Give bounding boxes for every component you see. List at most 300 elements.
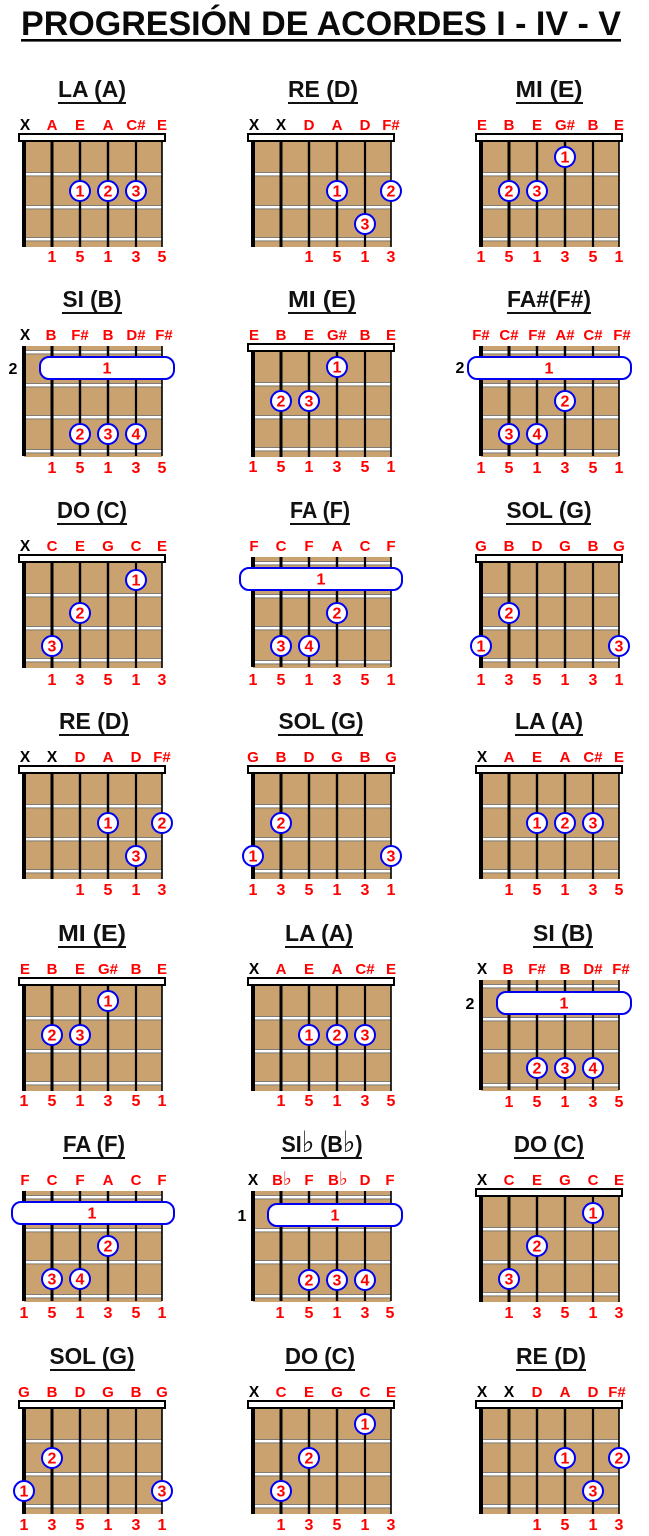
note names <box>248 1169 395 1190</box>
interval numbers: 5 <box>158 460 167 477</box>
interval numbers: 1 <box>132 882 141 899</box>
interval numbers: 1 <box>305 459 314 476</box>
interval numbers: 3 <box>48 1517 57 1534</box>
finger positions <box>468 357 631 444</box>
note names: G <box>102 538 114 555</box>
fret number: 2 <box>9 361 18 378</box>
note names: X <box>20 749 31 766</box>
interval numbers: 5 <box>615 1094 624 1111</box>
chord: LA (A) row 1 <box>19 76 167 266</box>
note names: G <box>559 1172 571 1189</box>
note names: C <box>588 1172 599 1189</box>
interval numbers: 3 <box>589 882 598 899</box>
interval numbers: 1 <box>333 1093 342 1110</box>
finger positions: 1 <box>560 996 569 1012</box>
note names: X <box>249 961 260 978</box>
interval numbers: 1 <box>333 882 342 899</box>
note names: D# <box>583 961 603 978</box>
chord name: LA (A) <box>515 708 583 734</box>
note names: F <box>385 1172 395 1189</box>
interval numbers: 5 <box>277 672 286 689</box>
interval numbers: 3 <box>561 249 570 266</box>
finger positions <box>271 357 347 411</box>
finger positions: 2 <box>277 394 286 410</box>
note names: C <box>360 1384 371 1401</box>
interval numbers: 5 <box>305 882 314 899</box>
finger positions: 3 <box>505 426 514 444</box>
finger positions: 2 <box>305 1450 314 1468</box>
note names: D <box>532 538 543 555</box>
finger positions <box>98 813 172 866</box>
finger positions: 1 <box>104 994 113 1010</box>
note names: F# <box>71 327 89 344</box>
note names: E <box>386 327 396 344</box>
interval numbers: 1 <box>249 882 258 899</box>
interval numbers: 1 <box>20 1093 29 1110</box>
finger positions <box>268 1204 402 1290</box>
note names: F <box>386 538 396 555</box>
note names: E <box>157 117 167 134</box>
finger positions: 1 <box>545 360 554 378</box>
interval numbers: 5 <box>158 249 167 266</box>
note names: C <box>504 1172 515 1189</box>
interval numbers: 3 <box>333 459 342 476</box>
note names: X <box>47 749 58 766</box>
chord: RE (D) row 7 <box>476 1343 629 1534</box>
note names: E <box>614 1172 624 1189</box>
interval numbers: 5 <box>104 672 113 689</box>
interval numbers: 1 <box>533 249 542 266</box>
fret number: 2 <box>456 360 465 377</box>
chord name: FA#(F#) <box>507 286 591 312</box>
chord name: SI (B) <box>62 286 122 312</box>
interval numbers: 1 <box>615 249 624 266</box>
note names: C# <box>499 327 519 344</box>
interval numbers: 5 <box>533 672 542 689</box>
interval numbers: 1 <box>277 1517 286 1534</box>
interval numbers <box>20 1093 167 1110</box>
fretboard <box>19 766 165 879</box>
interval numbers <box>48 672 167 689</box>
note names: B <box>504 117 515 134</box>
note names: X <box>20 327 31 344</box>
finger positions: 2 <box>533 1060 542 1078</box>
interval numbers: 5 <box>361 459 370 476</box>
finger positions: 4 <box>589 1060 598 1078</box>
interval numbers: 5 <box>561 1517 570 1534</box>
interval numbers: 1 <box>505 1305 514 1322</box>
note names: G <box>613 538 625 555</box>
finger positions: 2 <box>305 1272 314 1290</box>
interval numbers: 5 <box>305 1093 314 1110</box>
note names: F# <box>613 327 631 344</box>
interval numbers <box>276 1305 395 1322</box>
interval numbers: 1 <box>561 882 570 899</box>
finger positions: 1 <box>331 1208 340 1224</box>
interval numbers: 3 <box>387 1517 396 1534</box>
note names: A <box>103 1172 114 1189</box>
interval numbers: 1 <box>104 460 113 477</box>
note names: E <box>157 961 167 978</box>
chord name: LA (A) <box>58 76 126 102</box>
finger positions <box>14 1448 172 1501</box>
note names: A <box>504 749 515 766</box>
finger positions: 3 <box>533 184 542 200</box>
interval numbers <box>249 882 396 899</box>
interval numbers: 1 <box>104 1517 113 1534</box>
finger positions: 2 <box>48 1028 57 1044</box>
interval numbers: 1 <box>333 1305 342 1322</box>
interval numbers: 5 <box>387 1093 396 1110</box>
finger positions: 3 <box>305 394 314 410</box>
note names: B♭ <box>328 1169 348 1190</box>
fretboard <box>476 555 622 668</box>
finger positions <box>12 1202 174 1289</box>
interval numbers: 5 <box>533 1094 542 1111</box>
finger positions <box>497 992 631 1078</box>
note names: X <box>477 1172 488 1189</box>
interval numbers <box>305 249 396 266</box>
note names: A <box>47 117 58 134</box>
note names <box>20 1172 167 1189</box>
note names: E <box>532 1172 542 1189</box>
note names: B <box>276 327 287 344</box>
interval numbers: 5 <box>305 1305 314 1322</box>
note names: C <box>276 1384 287 1401</box>
finger positions: 3 <box>361 1028 370 1044</box>
interval numbers <box>505 882 624 899</box>
interval numbers: 5 <box>76 1517 85 1534</box>
note names: E <box>304 961 314 978</box>
chord name: RE (D) <box>288 76 358 102</box>
interval numbers: 1 <box>387 459 396 476</box>
interval numbers: 1 <box>48 672 57 689</box>
interval numbers: 5 <box>505 249 514 266</box>
interval numbers: 3 <box>387 249 396 266</box>
interval numbers: 1 <box>76 1093 85 1110</box>
note names <box>20 749 171 766</box>
interval numbers: 3 <box>277 882 286 899</box>
note names <box>20 117 167 134</box>
interval numbers: 3 <box>104 1093 113 1110</box>
note names <box>475 538 625 555</box>
note names: A <box>103 749 114 766</box>
interval numbers <box>76 882 167 899</box>
finger positions: 2 <box>387 184 396 200</box>
chord name: DO (C) <box>514 1131 584 1157</box>
interval numbers <box>477 672 624 689</box>
fretboard <box>19 555 165 668</box>
chord: SI (B) row 2 <box>9 286 174 477</box>
fret number: 1 <box>238 1208 247 1225</box>
note names: D <box>75 1384 86 1401</box>
note names: F <box>304 538 314 555</box>
finger positions: 3 <box>48 1272 57 1288</box>
note names: B <box>46 327 57 344</box>
interval numbers: 5 <box>132 1305 141 1322</box>
finger positions: 3 <box>132 184 141 200</box>
chord: SOL (G) row 7 <box>14 1343 172 1534</box>
interval numbers: 1 <box>104 249 113 266</box>
chord name: LA (A) <box>285 920 353 946</box>
note names: X <box>249 1384 260 1401</box>
chord: LA (A) row 5 <box>248 920 396 1110</box>
note names: F <box>75 1172 85 1189</box>
note names <box>249 538 396 555</box>
interval numbers <box>277 1517 396 1534</box>
interval numbers: 1 <box>305 249 314 266</box>
note names: F# <box>153 749 171 766</box>
interval numbers: 3 <box>333 672 342 689</box>
note names: C# <box>126 117 146 134</box>
note names: G <box>102 1384 114 1401</box>
note names <box>477 1172 624 1189</box>
note names: F# <box>528 961 546 978</box>
note names: D <box>304 117 315 134</box>
finger positions: 4 <box>533 426 542 444</box>
interval numbers: 1 <box>387 882 396 899</box>
interval numbers: 1 <box>361 249 370 266</box>
note names: B <box>131 961 142 978</box>
note names: C <box>47 1172 58 1189</box>
note names: A <box>560 749 571 766</box>
note names: F <box>157 1172 167 1189</box>
finger positions: 4 <box>305 638 314 656</box>
note names: D <box>588 1384 599 1401</box>
note names: E <box>75 961 85 978</box>
note names: E <box>304 1384 314 1401</box>
note names: A <box>332 117 343 134</box>
fretboard <box>476 1189 622 1302</box>
note names: G# <box>98 961 119 978</box>
chord name: MI (E) <box>58 920 126 946</box>
finger positions: 1 <box>20 1484 29 1500</box>
note names: C# <box>583 327 603 344</box>
finger positions: 2 <box>533 1238 542 1256</box>
note names: C <box>360 538 371 555</box>
finger positions <box>327 181 401 234</box>
note names: X <box>477 1384 488 1401</box>
finger positions: 2 <box>48 1450 57 1468</box>
note names <box>249 117 400 134</box>
finger positions: 2 <box>505 184 514 200</box>
interval numbers: 5 <box>48 1305 57 1322</box>
finger positions <box>42 570 146 656</box>
finger positions: 2 <box>76 426 85 444</box>
interval numbers: 1 <box>20 1305 29 1322</box>
note names: B <box>47 1384 58 1401</box>
note names <box>249 327 396 344</box>
interval numbers: 1 <box>615 672 624 689</box>
finger positions <box>299 1025 375 1045</box>
finger positions <box>70 181 146 201</box>
finger positions <box>243 813 401 866</box>
chord: LA (A) row 4 <box>476 708 624 899</box>
interval numbers: 1 <box>505 1094 514 1111</box>
finger positions <box>499 147 575 201</box>
interval numbers: 3 <box>561 460 570 477</box>
interval numbers: 3 <box>158 882 167 899</box>
finger positions: 3 <box>104 426 113 444</box>
note names <box>20 538 167 555</box>
finger positions <box>240 568 402 656</box>
chord: SI♭ (B♭) row 6 <box>238 1125 402 1322</box>
note names <box>249 961 396 978</box>
interval numbers: 5 <box>615 882 624 899</box>
chord: FA#(F#) row 2 <box>456 286 631 477</box>
fretboard <box>479 346 620 457</box>
fretboard <box>19 978 165 1091</box>
interval numbers: 3 <box>589 1094 598 1111</box>
finger positions: 1 <box>132 572 141 590</box>
note names: G <box>331 749 343 766</box>
finger positions: 4 <box>132 426 141 444</box>
interval numbers: 1 <box>305 672 314 689</box>
interval numbers: 3 <box>615 1517 624 1534</box>
finger positions: 2 <box>158 816 167 832</box>
interval numbers <box>20 1305 167 1322</box>
interval numbers: 5 <box>76 460 85 477</box>
finger positions: 1 <box>477 638 486 656</box>
note names: G <box>156 1384 168 1401</box>
interval numbers: 3 <box>132 249 141 266</box>
fret number: 2 <box>466 996 475 1013</box>
note names: B♭ <box>272 1169 292 1190</box>
fretboard <box>479 980 620 1091</box>
note names: B <box>503 961 514 978</box>
interval numbers <box>249 459 396 476</box>
interval numbers: 3 <box>158 672 167 689</box>
note names: D <box>360 1172 371 1189</box>
finger positions <box>471 603 629 656</box>
chord name: MI (E) <box>516 76 582 102</box>
finger positions: 1 <box>561 1450 570 1468</box>
finger positions: 4 <box>76 1272 85 1288</box>
interval numbers: 1 <box>158 1093 167 1110</box>
note names: X <box>249 117 260 134</box>
finger positions: 3 <box>615 638 624 656</box>
interval numbers: 1 <box>20 1517 29 1534</box>
finger positions <box>271 1414 375 1501</box>
finger positions: 3 <box>589 816 598 832</box>
fretboard <box>248 1401 394 1514</box>
interval numbers: 3 <box>533 1305 542 1322</box>
interval numbers <box>533 1517 624 1534</box>
interval numbers: 1 <box>249 672 258 689</box>
note names: C <box>131 538 142 555</box>
interval numbers: 3 <box>132 1517 141 1534</box>
interval numbers: 3 <box>589 672 598 689</box>
finger positions: 2 <box>277 816 286 832</box>
note names: G# <box>327 327 348 344</box>
interval numbers: 5 <box>277 459 286 476</box>
chord: MI (E) row 1 <box>476 76 624 266</box>
interval numbers <box>48 249 167 266</box>
chord: RE (D) row 4 <box>19 708 172 899</box>
title: PROGRESIÓN DE ACORDES I - IV - V <box>21 5 621 43</box>
finger positions <box>42 991 118 1045</box>
note names: X <box>20 538 31 555</box>
note names: F# <box>608 1384 626 1401</box>
finger positions: 1 <box>249 848 258 866</box>
interval numbers: 3 <box>615 1305 624 1322</box>
interval numbers: 1 <box>76 882 85 899</box>
note names: E <box>20 961 30 978</box>
note names <box>477 749 624 766</box>
chord name: FA (F) <box>63 1131 125 1157</box>
note names <box>247 749 397 766</box>
note names <box>249 1384 396 1401</box>
fretboard <box>22 1191 163 1302</box>
interval numbers: 1 <box>533 460 542 477</box>
interval numbers <box>477 460 624 477</box>
interval numbers: 1 <box>533 1517 542 1534</box>
finger positions: 1 <box>361 1416 370 1434</box>
finger positions: 3 <box>277 638 286 656</box>
finger positions: 1 <box>88 1206 97 1222</box>
chord name: SOL (G) <box>506 497 592 523</box>
note names: G <box>559 538 571 555</box>
note names: G <box>475 538 487 555</box>
interval numbers: 1 <box>361 1517 370 1534</box>
note names: B <box>560 961 571 978</box>
finger positions: 1 <box>305 1028 314 1044</box>
interval numbers: 3 <box>361 882 370 899</box>
finger positions: 2 <box>104 184 113 200</box>
note names: F <box>249 538 259 555</box>
interval numbers: 5 <box>533 882 542 899</box>
finger positions: 3 <box>277 1484 286 1500</box>
note names: B <box>360 327 371 344</box>
note names: D <box>131 749 142 766</box>
interval numbers: 3 <box>361 1305 370 1322</box>
note names: A <box>332 961 343 978</box>
note names: E <box>477 117 487 134</box>
interval numbers: 5 <box>104 882 113 899</box>
note names: A <box>332 538 343 555</box>
finger positions: 1 <box>104 816 113 832</box>
chord: DO (C) row 7 <box>248 1343 396 1534</box>
chord: SI (B) row 5 <box>466 920 631 1111</box>
fretboard <box>251 557 392 668</box>
interval numbers: 1 <box>48 249 57 266</box>
chord: DO (C) row 6 <box>476 1131 624 1322</box>
finger positions <box>40 357 174 444</box>
fretboard <box>22 346 163 457</box>
finger positions: 3 <box>387 848 396 866</box>
note names: C <box>47 538 58 555</box>
finger positions: 1 <box>533 816 542 832</box>
note names: F# <box>528 327 546 344</box>
chord: FA (F) row 6 <box>12 1131 174 1322</box>
chord: FA (F) row 3 <box>240 497 402 689</box>
interval numbers: 3 <box>76 672 85 689</box>
chord: MI (E) row 2 <box>248 286 396 476</box>
interval numbers: 1 <box>387 672 396 689</box>
note names: E <box>249 327 259 344</box>
interval numbers: 1 <box>158 1517 167 1534</box>
fretboard <box>19 134 165 247</box>
note names: E <box>532 749 542 766</box>
finger positions: 2 <box>333 1028 342 1044</box>
note names: E <box>386 961 396 978</box>
fretboard <box>248 134 394 247</box>
finger positions: 1 <box>561 150 570 166</box>
note names: E <box>614 749 624 766</box>
chord name: DO (C) <box>57 497 127 523</box>
interval numbers <box>477 249 624 266</box>
interval numbers: 5 <box>589 460 598 477</box>
